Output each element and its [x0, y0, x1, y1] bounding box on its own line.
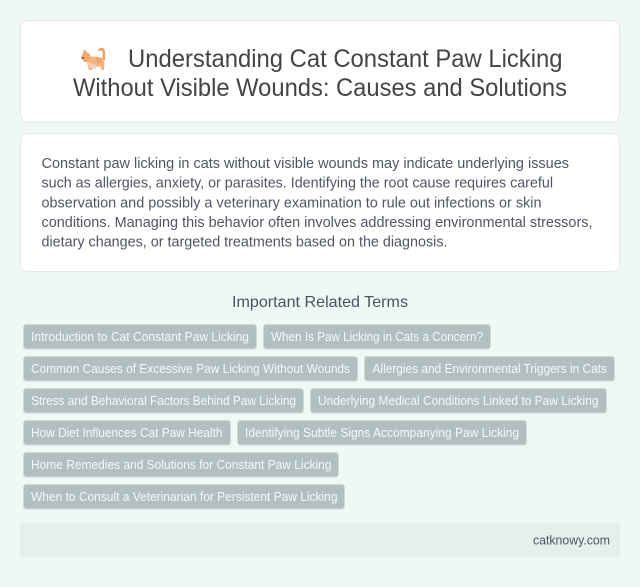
- chip: medical conditions: [310, 388, 606, 413]
- chip: home remedies: [24, 452, 338, 477]
- panel: summary paragraph: [20, 134, 620, 272]
- paragraph text: [42, 155, 592, 250]
- paragraph text: such as allergies, anxiety, or parasites. Identifying the root cause requires careful: [42, 174, 553, 192]
- chip: medical conditions: Underlying Medical Conditions Linked to Paw Licking: [318, 393, 598, 408]
- chip: stress: [24, 388, 304, 413]
- title text: [73, 45, 567, 102]
- title panel: [20, 20, 620, 122]
- chip: when a concern: When Is Paw Licking in Cats a Concern?: [271, 329, 483, 344]
- paragraph text: Constant paw licking in cats without visible wounds may indicate underlying issues: [42, 155, 569, 172]
- chip: introduction: Introduction to Cat Constant Paw Licking: [31, 329, 249, 344]
- paragraph text: conditions. Managing this behavior often involves addressing environmental stressors,: [42, 214, 592, 231]
- footer source text: catknowy.com: [533, 532, 610, 548]
- title text: Understanding Cat Constant Paw Licking: [128, 45, 562, 73]
- chip: allergies: [364, 356, 614, 381]
- panel: related term chips: [24, 324, 614, 509]
- paragraph text: dietary changes, or targeted treatments based on the diagnosis.: [42, 234, 448, 250]
- chip: allergies: Allergies and Environmental Triggers in Cats: [372, 361, 607, 376]
- paragraph text: observation and possibly a veterinary examination to rule out infections or skin: [42, 194, 542, 212]
- chip: home remedies: Home Remedies and Solutions for Constant Paw Licking: [31, 457, 332, 472]
- chip: common causes: [24, 356, 358, 381]
- chip: consult a veterinarian: [24, 484, 344, 509]
- chip: when a concern: [264, 324, 490, 349]
- chip: diet: [24, 420, 230, 445]
- footer: [20, 523, 620, 557]
- chip: stress: Stress and Behavioral Factors Behind Paw Licking: [31, 393, 296, 408]
- chip: subtle signs: [238, 420, 526, 445]
- chip: introduction: [24, 324, 256, 349]
- chip: common causes: Common Causes of Excessive Paw Licking Without Wounds: [31, 361, 350, 376]
- chip: diet: How Diet Influences Cat Paw Health: [31, 425, 222, 440]
- icon: cat: [81, 48, 105, 70]
- heading: important related terms: Important Related Terms: [232, 294, 408, 311]
- chip: consult a veterinarian: When to Consult a Veterinarian for Persistent Paw Licking: [31, 489, 338, 504]
- title text: Without Visible Wounds: Causes and Solutions: [73, 74, 567, 102]
- chip: subtle signs: Identifying Subtle Signs Accompanying Paw Licking: [245, 425, 519, 440]
